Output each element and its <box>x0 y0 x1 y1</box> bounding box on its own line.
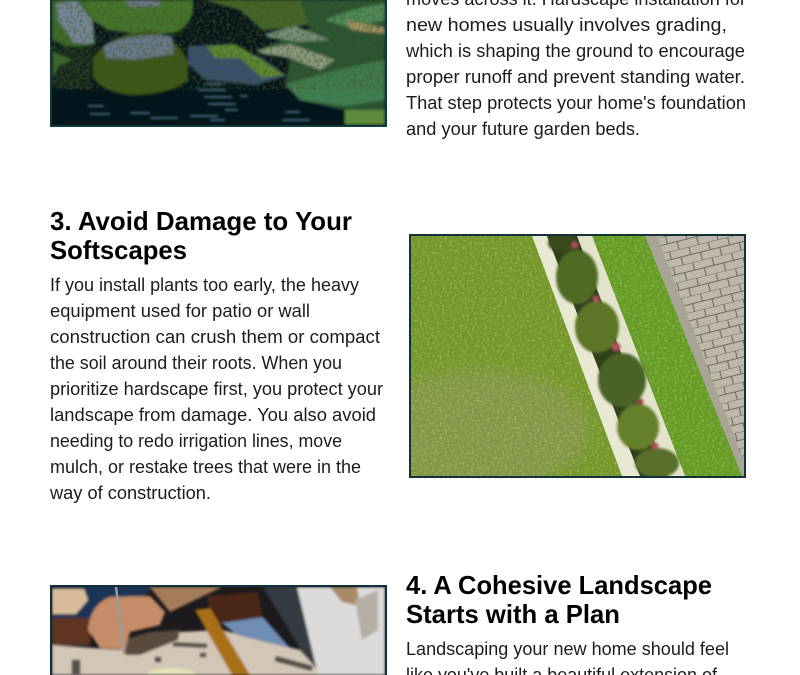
heading: 3. Avoid Damage to Your Softscapes <box>50 206 352 265</box>
body text: softscape damage paragraph: landscape from damage. You also avoid <box>50 405 376 425</box>
body text: softscape damage paragraph <box>49 275 383 503</box>
heading: 4. A Cohesive Landscape Starts with a Plan: Starts with a Plan <box>406 599 620 629</box>
body text: grading paragraph <box>405 0 746 139</box>
heading: 3. Avoid Damage to Your Softscapes: Softscapes <box>50 235 187 265</box>
body text: softscape damage paragraph: mulch, or restake trees that were in the <box>50 457 361 477</box>
body text: cohesive landscape paragraph: Landscaping your new home should feel <box>406 639 729 659</box>
body text: softscape damage paragraph: way of construction. <box>49 483 211 503</box>
body text: softscape damage paragraph: prioritize hardscape first, you protect your <box>50 379 383 399</box>
heading: 4. A Cohesive Landscape Starts with a Plan <box>406 570 712 629</box>
photo: mossy rocks and pond with ferns <box>50 0 387 127</box>
body text: grading paragraph: new homes usually involves grading, <box>406 15 727 35</box>
body text: grading paragraph: proper runoff and prevent standing water. <box>406 67 745 87</box>
body text: softscape damage paragraph: equipment used for patio or wall <box>50 301 310 321</box>
heading: 4. A Cohesive Landscape Starts with a Plan: 4. A Cohesive Landscape <box>406 570 712 600</box>
body text: grading paragraph: and your future garden beds. <box>406 119 640 139</box>
body text: softscape damage paragraph: the soil around their roots. When you <box>50 353 342 373</box>
body text: softscape damage paragraph: construction can crush them or compact <box>50 327 380 347</box>
body text: softscape damage paragraph: If you install plants too early, the heavy <box>50 275 359 295</box>
photo: hand drawing a landscape plan <box>50 585 387 675</box>
body text: softscape damage paragraph: needing to redo irrigation lines, move <box>50 431 342 451</box>
photo: lawn with shrub border and brick path <box>409 234 746 478</box>
body text: grading paragraph: That step protects your home's foundation <box>406 93 746 113</box>
body text: cohesive landscape paragraph <box>406 639 729 675</box>
body text: grading paragraph: which is shaping the ground to encourage <box>405 41 745 61</box>
heading: 3. Avoid Damage to Your Softscapes: 3. Avoid Damage to Your <box>50 206 352 236</box>
